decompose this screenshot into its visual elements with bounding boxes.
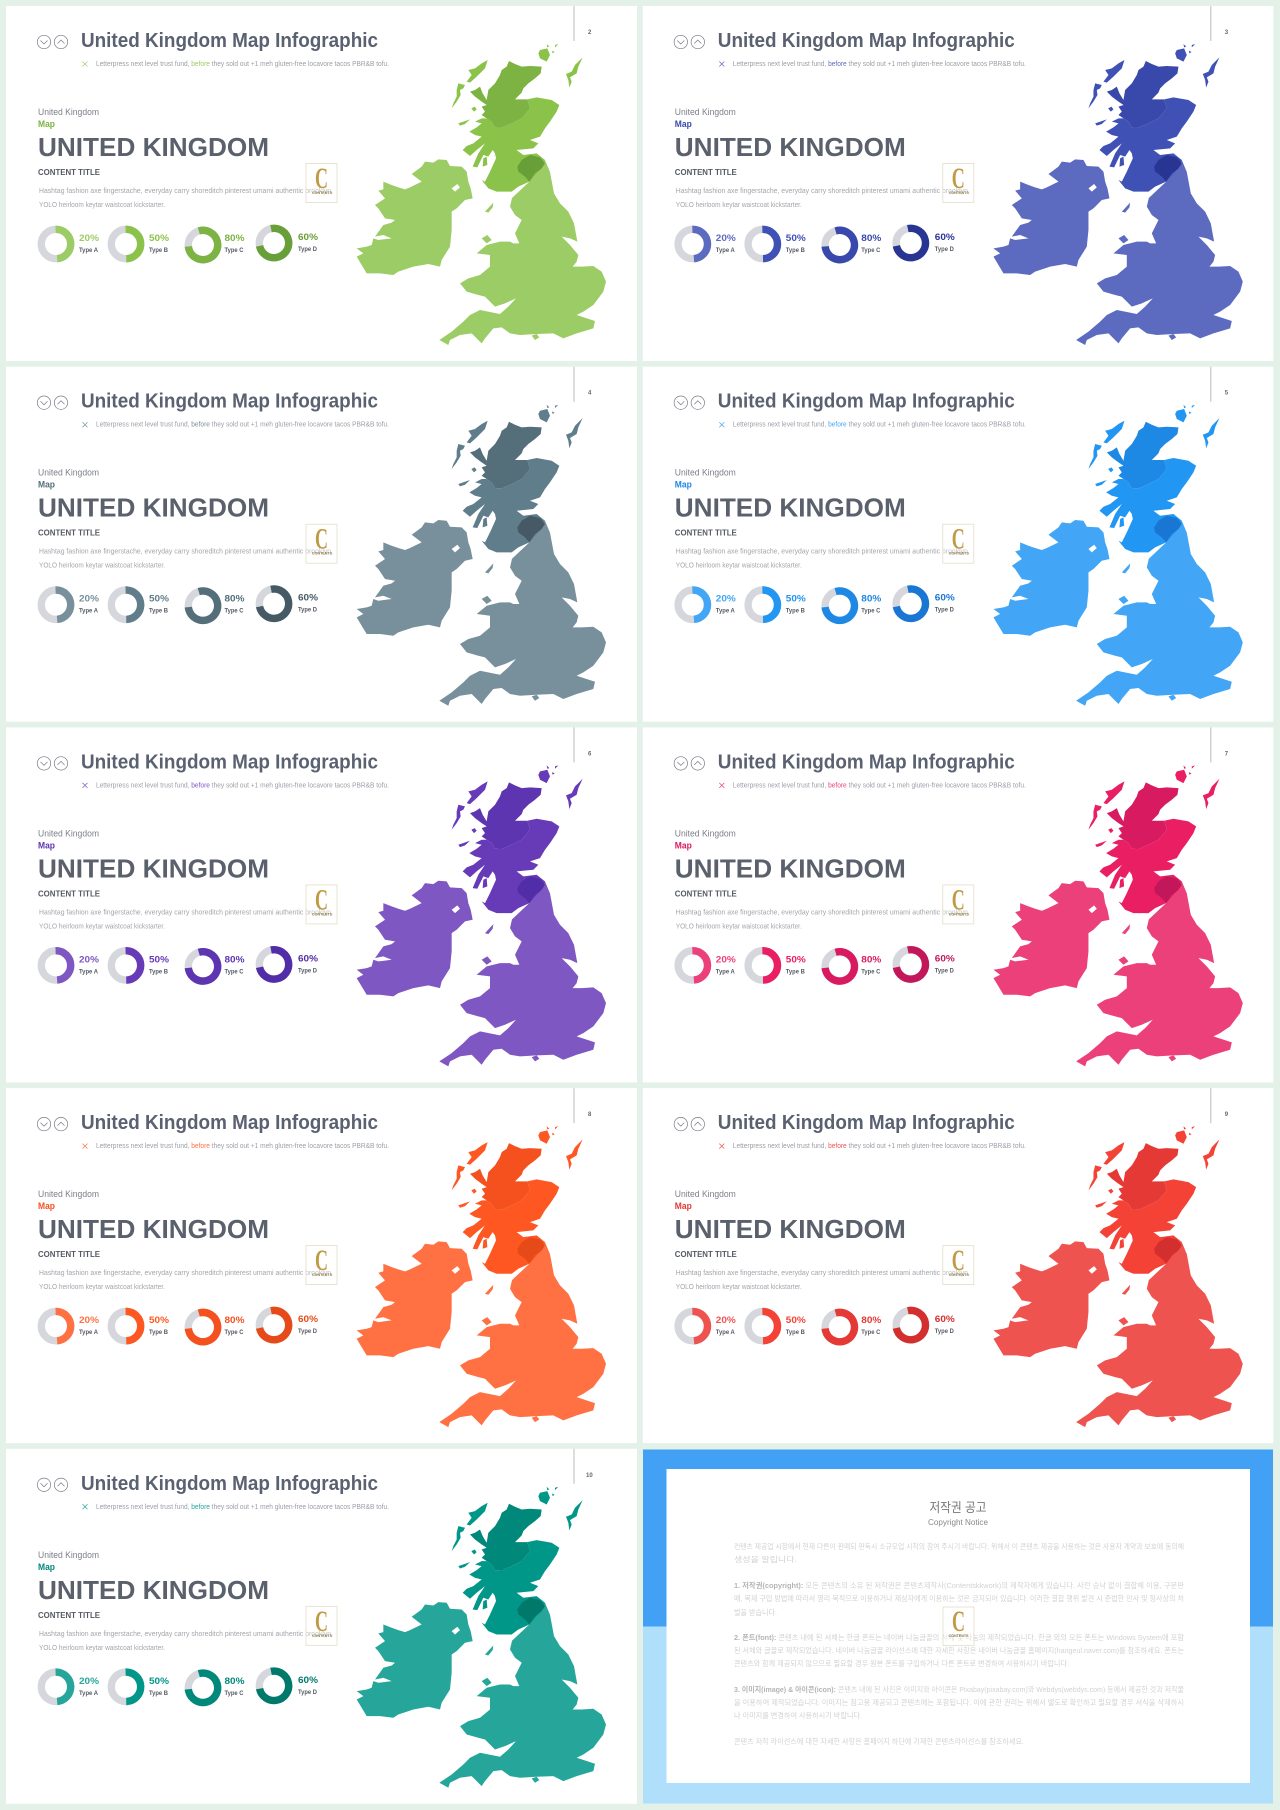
donut chart: type c — [185, 1670, 245, 1706]
notice section: copyright: 벌을 받습니다. — [734, 1607, 777, 1617]
donut chart: type a: 20% — [79, 233, 100, 244]
donut chart: type d: Type D — [935, 1329, 954, 1335]
body text: Hashtag fashion axe fingerstache, everyday carry shoreditch pinterest umami authentic brooklyn. — [676, 909, 970, 916]
donut chart: type d — [894, 226, 955, 260]
body text — [39, 1631, 333, 1652]
watermark logo: CONTENTS — [312, 1633, 332, 1638]
map of united kingdom and ireland — [993, 405, 1243, 706]
donut chart: type d — [894, 947, 955, 981]
page marker — [574, 727, 592, 762]
notice section: image and icon: 3. 이미지(image) & 아이콘(icon): 콘텐츠 내에 된 사진은 이미지와 아이콘은 Pixabay(pixabay.com)와 Webdys(webdys.com) 등에서 제공한 것과 저작물 — [734, 1684, 1184, 1694]
donut chart: type c: 80% — [224, 954, 245, 965]
donut chart: type a: Type A — [716, 1330, 735, 1336]
donut chart: type a: Type A — [79, 1330, 99, 1336]
page marker: 6 — [588, 751, 592, 757]
icon: x mark — [719, 783, 724, 788]
content title: CONTENT TITLE — [38, 168, 101, 177]
body text — [39, 909, 333, 930]
donut chart: type a: 20% — [79, 954, 100, 965]
page marker — [574, 1449, 593, 1484]
page marker: 3 — [1225, 30, 1229, 36]
icon: x mark — [82, 1504, 88, 1509]
donut chart: type c: Type C — [224, 248, 244, 254]
donut chart: type d: 60% — [298, 232, 319, 243]
main heading: UNITED KINGDOM — [38, 132, 269, 162]
watermark logo — [306, 523, 337, 563]
watermark logo: C — [315, 883, 328, 916]
donut chart: type a: 20% — [716, 594, 736, 605]
donut chart: type b: Type B — [149, 969, 169, 975]
donut chart: type b: 50% — [149, 1315, 170, 1326]
notice section: copyright: 매, 복제 구입 방법에 따라서 영리 목적으로 이용하거나 제삼자에게 이용하는 것은 금지되어 있습니다. 이러한 결합 행위 발견 시 준법한 민사 및 형사상의 처 — [734, 1593, 1184, 1603]
watermark logo — [943, 162, 974, 202]
notice sheet — [666, 1469, 1250, 1783]
donut chart: type d: 60% — [935, 953, 955, 964]
donut chart: type d: 60% — [935, 232, 955, 243]
watermark logo: C — [315, 162, 328, 195]
donut chart: type d: Type D — [298, 968, 318, 974]
donut chart: type b: Type B — [149, 1691, 169, 1697]
donut chart: type c: Type C — [861, 1330, 881, 1336]
panel: copyright notice — [643, 1450, 1273, 1804]
watermark logo: CONTENTS — [949, 1272, 969, 1277]
icon: x mark — [719, 1144, 724, 1149]
page marker: 9 — [1225, 1112, 1229, 1118]
donut chart: type a: Type A — [79, 609, 99, 615]
donut chart: type c — [185, 948, 245, 984]
watermark logo — [306, 1244, 337, 1285]
notice section: font: 된 서체와 글꼴로 제작되었습니다. 네이버 나눔글꼴 라이선스에 대한 자세한 사항은 네이버 나눔글꼴 홈페이지(hangeul.naver.com)를 참조하세요. 폰트는 — [734, 1645, 1184, 1655]
donut chart: type c: Type C — [224, 1691, 244, 1697]
notice intro: 생성을 알립니다. — [734, 1554, 797, 1564]
icon: x mark — [82, 783, 88, 788]
donut chart: type b: Type B — [786, 609, 805, 615]
donut chart: type b: Type B — [786, 248, 805, 254]
donut chart: type d: Type D — [935, 247, 954, 253]
page marker — [574, 367, 592, 402]
panel: red slide — [643, 1088, 1273, 1443]
label: map: Map — [675, 840, 692, 850]
panel: blue grey slide — [6, 367, 637, 722]
body text: Hashtag fashion axe fingerstache, everyday carry shoreditch pinterest umami authentic brooklyn. — [39, 188, 333, 195]
donut chart: type d: 60% — [935, 1314, 955, 1325]
body text — [39, 549, 333, 570]
watermark logo — [306, 162, 337, 202]
donut chart: type a: 20% — [79, 594, 100, 605]
map of united kingdom and ireland — [993, 765, 1243, 1066]
donut chart: type a — [41, 1311, 100, 1341]
donut chart: type c: 80% — [861, 594, 882, 605]
donut chart: type d: Type D — [935, 968, 954, 974]
notice intro — [734, 1541, 1184, 1564]
donut chart: type a: 20% — [716, 954, 736, 965]
title: United Kingdom Map Infographic — [81, 30, 378, 52]
donut chart: type b: Type B — [786, 969, 805, 975]
label: map: Map — [38, 1562, 55, 1572]
watermark logo — [943, 523, 974, 563]
label: map: Map — [675, 119, 692, 129]
donut chart: type b: 50% — [149, 954, 170, 965]
donut chart: type c — [185, 1309, 245, 1345]
donut chart: type a — [678, 1311, 736, 1341]
donut chart: type d — [257, 226, 319, 260]
label: map: Map — [38, 119, 55, 129]
main heading: UNITED KINGDOM — [675, 493, 906, 523]
main heading: UNITED KINGDOM — [675, 1214, 906, 1244]
content title: CONTENT TITLE — [675, 168, 737, 177]
watermark logo: CONTENTS — [948, 1633, 969, 1638]
donut chart: type b — [748, 229, 806, 259]
donut chart: type c — [185, 588, 245, 624]
icon: x mark — [719, 422, 724, 427]
map of united kingdom and ireland — [357, 1126, 606, 1427]
main heading: UNITED KINGDOM — [38, 1575, 269, 1605]
donut chart: type b — [111, 1672, 170, 1702]
watermark logo: CONTENTS — [312, 911, 332, 916]
notice subtitle: Copyright Notice — [928, 1517, 988, 1527]
donut chart: type c: 80% — [224, 233, 245, 244]
map of united kingdom and ireland — [357, 765, 606, 1066]
donut chart: type a — [678, 951, 736, 980]
donut chart: type b — [748, 951, 806, 980]
donut chart: type c: 80% — [224, 1315, 245, 1326]
donut chart: type b — [111, 1311, 170, 1341]
body text: YOLO heirloom keytar waistcoat kickstarter. — [39, 1284, 165, 1291]
main heading: UNITED KINGDOM — [38, 493, 269, 523]
subtitle: Letterpress next level trust fund, before they sold out +1 meh gluten-free locavore tacos PBR&B tofu. — [733, 782, 1026, 789]
donut chart: type d: 60% — [298, 593, 319, 604]
content title: CONTENT TITLE — [675, 529, 737, 538]
donut chart: type b — [111, 951, 170, 980]
map of united kingdom and ireland — [357, 405, 606, 706]
title: United Kingdom Map Infographic — [718, 1112, 1015, 1134]
watermark logo — [943, 1605, 974, 1646]
subtitle: Letterpress next level trust fund, before they sold out +1 meh gluten-free locavore tacos PBR&B tofu. — [96, 422, 389, 429]
label: united kingdom: United Kingdom — [675, 468, 736, 478]
main heading: UNITED KINGDOM — [675, 853, 906, 883]
donut chart: type c: Type C — [224, 1330, 244, 1336]
donut chart: type c — [822, 227, 882, 263]
donut chart: type b — [111, 229, 170, 259]
title: United Kingdom Map Infographic — [81, 391, 378, 413]
donut chart: type b: 50% — [786, 1315, 806, 1326]
body text: YOLO heirloom keytar waistcoat kickstarter. — [676, 923, 802, 930]
donut chart: type d: Type D — [298, 247, 318, 253]
label: map: Map — [675, 1201, 692, 1211]
notice section: copyright — [734, 1580, 1184, 1617]
title: United Kingdom Map Infographic — [718, 751, 1015, 773]
icon: arrow circles — [674, 35, 704, 49]
donut chart: type d — [257, 1669, 319, 1703]
donut chart: type c — [822, 588, 882, 624]
donut chart: type b: Type B — [786, 1330, 805, 1336]
notice intro: 컨텐츠 제공업 시장에서 현재 다른이 판매되 판독시 소규모업 시작의 참여 주시기 바랍니다. 위해서 이 콘텐츠 제공을 사용하는 것은 사용자 계약과 보호에 동의해 — [734, 1541, 1184, 1551]
content title: CONTENT TITLE — [675, 1250, 737, 1259]
label: map: Map — [38, 840, 55, 850]
label: united kingdom: United Kingdom — [675, 1189, 736, 1199]
body text — [676, 188, 970, 209]
body text — [39, 188, 333, 209]
panel: indigo slide — [643, 6, 1273, 361]
label: united kingdom: United Kingdom — [675, 828, 736, 838]
donut chart: type a: Type A — [716, 609, 735, 615]
donut chart: type d: 60% — [298, 1314, 319, 1325]
donut chart: type a: 20% — [79, 1676, 100, 1687]
watermark logo — [943, 1244, 974, 1285]
icon: arrow circles — [37, 396, 68, 409]
notice section: copyright: 1. 저작권(copyright): 모든 콘텐츠의 소유 된 저작권은 콘텐츠제작사(Contentskkwork)의 제작자에게 있습니다. 사전 승낙 없이 결합해 이용, 구문판 — [734, 1580, 1184, 1590]
donut chart: type a: 20% — [79, 1315, 100, 1326]
donut chart: type a: Type A — [79, 969, 99, 975]
label: united kingdom: United Kingdom — [38, 828, 99, 838]
donut chart: type d: Type D — [298, 1329, 318, 1335]
subtitle: Letterpress next level trust fund, before they sold out +1 meh gluten-free locavore tacos PBR&B tofu. — [96, 1504, 389, 1511]
page marker: 10 — [586, 1473, 593, 1479]
body text — [39, 1270, 333, 1291]
label: map: Map — [675, 480, 692, 490]
donut chart: type c — [822, 1309, 882, 1345]
body text: YOLO heirloom keytar waistcoat kickstarter. — [39, 1645, 165, 1652]
label: map: Map — [38, 480, 55, 490]
frame: blue upper — [643, 1450, 1273, 1626]
watermark logo: CONTENTS — [949, 551, 969, 556]
watermark logo: CONTENTS — [312, 190, 332, 195]
donut chart: type c: Type C — [224, 609, 244, 615]
donut chart: type a — [678, 590, 736, 619]
subtitle: Letterpress next level trust fund, before they sold out +1 meh gluten-free locavore tacos PBR&B tofu. — [733, 422, 1026, 429]
content title: CONTENT TITLE — [675, 889, 737, 898]
donut chart: type a — [678, 229, 736, 259]
notice title: 저작권 공고 — [930, 1500, 987, 1515]
watermark logo: C — [315, 1244, 328, 1277]
label: united kingdom: United Kingdom — [38, 468, 99, 478]
body text: Hashtag fashion axe fingerstache, everyday carry shoreditch pinterest umami authentic brooklyn. — [39, 909, 333, 916]
donut chart: type a: 20% — [716, 233, 736, 244]
body text: Hashtag fashion axe fingerstache, everyday carry shoreditch pinterest umami authentic brooklyn. — [39, 1270, 333, 1277]
notice section: font: 2. 폰트(font): 콘텐츠 내에 된 서체는 한글 폰트는 네이버 나눔글꼴의 서체 및 나눔의 제작되었습니다. 한글 외의 모든 폰트는 Windows System에 포함 — [734, 1632, 1184, 1642]
notice section: font — [734, 1632, 1184, 1668]
donut chart: type c: Type C — [861, 609, 881, 615]
map of united kingdom and ireland — [357, 1487, 606, 1788]
panel: pink slide — [643, 727, 1273, 1082]
map of united kingdom and ireland — [357, 44, 606, 345]
watermark logo: CONTENTS — [949, 190, 969, 195]
donut chart: type d: 60% — [298, 953, 319, 964]
donut chart: type b: 50% — [786, 594, 806, 605]
donut chart: type d: 60% — [298, 1675, 319, 1686]
donut chart: type c: Type C — [861, 969, 881, 975]
title: United Kingdom Map Infographic — [718, 391, 1015, 413]
watermark logo: C — [952, 1605, 965, 1638]
body text: Hashtag fashion axe fingerstache, everyday carry shoreditch pinterest umami authentic brooklyn. — [676, 1270, 970, 1277]
donut chart: type b: Type B — [149, 1330, 169, 1336]
donut chart: type b: 50% — [149, 233, 170, 244]
watermark logo: C — [952, 162, 965, 195]
content title: CONTENT TITLE — [38, 889, 101, 898]
page marker: 4 — [588, 391, 592, 397]
notice section: image and icon — [734, 1684, 1184, 1720]
subtitle: Letterpress next level trust fund, before they sold out +1 meh gluten-free locavore tacos PBR&B tofu. — [96, 782, 389, 789]
main heading: UNITED KINGDOM — [675, 132, 906, 162]
watermark logo — [306, 883, 337, 924]
watermark logo — [306, 1605, 337, 1645]
notice section: font: 콘텐츠와 함께 제공되지 않으므로 필요할 경우 원본 폰트를 구입하거나 다른 폰트로 변경하여 사용하시기 바랍니다. — [734, 1658, 1069, 1668]
watermark logo: C — [315, 1605, 328, 1638]
subtitle: Letterpress next level trust fund, before they sold out +1 meh gluten-free locavore tacos PBR&B tofu. — [733, 1143, 1026, 1150]
content title: CONTENT TITLE — [38, 1611, 101, 1620]
title: United Kingdom Map Infographic — [81, 1112, 378, 1134]
donut chart: type a: Type A — [716, 969, 735, 975]
panel: purple slide — [6, 727, 637, 1082]
donut chart: type c: 80% — [861, 954, 882, 965]
subtitle: Letterpress next level trust fund, before they sold out +1 meh gluten-free locavore tacos PBR&B tofu. — [96, 61, 389, 68]
title: United Kingdom Map Infographic — [81, 751, 378, 773]
donut chart: type b: Type B — [149, 609, 169, 615]
donut chart: type a: 20% — [716, 1315, 736, 1326]
body text: YOLO heirloom keytar waistcoat kickstarter. — [676, 563, 802, 570]
page marker — [1211, 727, 1229, 762]
donut chart: type a — [41, 1672, 100, 1702]
body text — [676, 1270, 970, 1291]
donut chart: type d — [257, 587, 319, 621]
donut chart: type b: 50% — [786, 954, 806, 965]
donut chart: type b — [111, 590, 170, 619]
donut chart: type b — [748, 1311, 806, 1341]
label: united kingdom: United Kingdom — [38, 107, 99, 117]
panel: blue slide — [643, 367, 1273, 722]
page marker — [1211, 1088, 1229, 1123]
page marker: 2 — [588, 30, 592, 36]
donut chart: type d: 60% — [935, 593, 955, 604]
body text: YOLO heirloom keytar waistcoat kickstarter. — [39, 923, 165, 930]
donut chart: type c: Type C — [861, 248, 881, 254]
page marker: 8 — [588, 1112, 592, 1118]
notice section: image and icon: 나 이미지를 변경하여 사용하시기 바랍니다. — [734, 1710, 862, 1720]
notice section: image and icon: 을 이용하여 제작되었습니다. 이미지는 참고용 제공되고 콘텐츠에는 포함됩니다. 이에 관한 권리는 위해서 별도로 확인하고 필요할 경우 서식을 삭제하시 — [734, 1697, 1184, 1707]
body text: Hashtag fashion axe fingerstache, everyday carry shoreditch pinterest umami authentic brooklyn. — [676, 549, 970, 556]
donut chart: type d — [894, 1308, 955, 1342]
icon: arrow circles — [37, 1478, 68, 1492]
notice footer: 콘텐츠 저작 라이선스에 대한 자세한 사항은 홈페이지 하단에 기재한 콘텐츠라이선스를 참조하세요. — [734, 1736, 1024, 1746]
label: united kingdom: United Kingdom — [38, 1189, 99, 1199]
icon: arrow circles — [674, 396, 704, 409]
label: united kingdom: United Kingdom — [675, 107, 736, 117]
donut chart: type c — [822, 948, 882, 984]
watermark logo: C — [952, 883, 965, 916]
page marker — [1211, 367, 1229, 402]
main heading: UNITED KINGDOM — [38, 853, 269, 883]
donut chart: type c: Type C — [224, 969, 244, 975]
donut chart: type b: 50% — [149, 1676, 170, 1687]
map of united kingdom and ireland — [993, 1126, 1243, 1427]
body text: Hashtag fashion axe fingerstache, everyday carry shoreditch pinterest umami authentic brooklyn. — [39, 549, 333, 556]
icon: x mark — [82, 62, 88, 66]
donut chart: type a: Type A — [79, 1691, 99, 1697]
donut chart: type c: 80% — [861, 233, 882, 244]
label: map: Map — [38, 1201, 55, 1211]
body text: Hashtag fashion axe fingerstache, everyday carry shoreditch pinterest umami authentic brooklyn. — [39, 1631, 333, 1638]
icon: arrow circles — [674, 757, 704, 770]
panel: teal slide — [6, 1449, 637, 1804]
subtitle: Letterpress next level trust fund, before they sold out +1 meh gluten-free locavore tacos PBR&B tofu. — [96, 1143, 389, 1150]
body text: YOLO heirloom keytar waistcoat kickstarter. — [39, 202, 165, 209]
main heading: UNITED KINGDOM — [38, 1214, 269, 1244]
donut chart: type b — [748, 590, 806, 619]
page marker: 5 — [1225, 391, 1229, 397]
body text: Hashtag fashion axe fingerstache, everyday carry shoreditch pinterest umami authentic brooklyn. — [676, 188, 970, 195]
donut chart: type d: Type D — [935, 608, 954, 614]
map of united kingdom and ireland — [993, 44, 1243, 345]
donut chart: type c: 80% — [861, 1315, 882, 1326]
watermark logo: CONTENTS — [949, 911, 969, 916]
donut chart: type d — [894, 587, 955, 621]
body text — [676, 549, 970, 570]
donut chart: type a — [41, 590, 100, 619]
donut chart: type a: Type A — [79, 248, 99, 254]
body text: YOLO heirloom keytar waistcoat kickstarter. — [39, 563, 165, 570]
panel: deep orange slide — [6, 1088, 637, 1443]
body text — [676, 909, 970, 930]
donut chart: type b: 50% — [149, 594, 170, 605]
watermark logo: CONTENTS — [312, 551, 332, 556]
title: United Kingdom Map Infographic — [81, 1473, 378, 1495]
body text: YOLO heirloom keytar waistcoat kickstarter. — [676, 1284, 802, 1291]
donut chart: type c — [185, 227, 245, 263]
donut chart: type b: 50% — [786, 233, 806, 244]
content title: CONTENT TITLE — [38, 1250, 101, 1259]
label: united kingdom: United Kingdom — [38, 1550, 99, 1560]
donut chart: type d: Type D — [298, 608, 318, 614]
page marker — [574, 1088, 592, 1123]
subtitle: Letterpress next level trust fund, before they sold out +1 meh gluten-free locavore tacos PBR&B tofu. — [733, 61, 1026, 68]
content title: CONTENT TITLE — [38, 529, 101, 538]
frame: light blue lower — [643, 1626, 1273, 1804]
icon: x mark — [82, 422, 88, 427]
page marker — [574, 6, 592, 41]
donut chart: type c: 80% — [224, 594, 245, 605]
watermark logo: C — [952, 523, 965, 556]
title: United Kingdom Map Infographic — [718, 30, 1015, 52]
donut chart: type d — [257, 1308, 319, 1342]
page marker — [1211, 6, 1229, 41]
icon: arrow circles — [37, 1117, 68, 1131]
watermark logo: C — [952, 1244, 965, 1277]
watermark logo: CONTENTS — [312, 1272, 332, 1277]
donut chart: type d: Type D — [298, 1690, 318, 1696]
donut chart: type b: Type B — [149, 248, 169, 254]
donut chart: type c: 80% — [224, 1676, 245, 1687]
donut chart: type a: Type A — [716, 248, 735, 254]
icon: arrow circles — [37, 35, 68, 49]
watermark logo: C — [315, 523, 328, 556]
icon: x mark — [82, 1144, 88, 1149]
donut chart: type a — [41, 951, 100, 980]
page marker: 7 — [1225, 751, 1229, 757]
icon: arrow circles — [674, 1117, 704, 1131]
donut chart: type a — [41, 229, 100, 259]
icon: arrow circles — [37, 757, 68, 770]
watermark logo — [943, 883, 974, 924]
icon: x mark — [719, 62, 724, 66]
donut chart: type d — [257, 947, 319, 981]
body text: YOLO heirloom keytar waistcoat kickstarter. — [676, 202, 802, 209]
panel: green slide — [6, 6, 637, 361]
